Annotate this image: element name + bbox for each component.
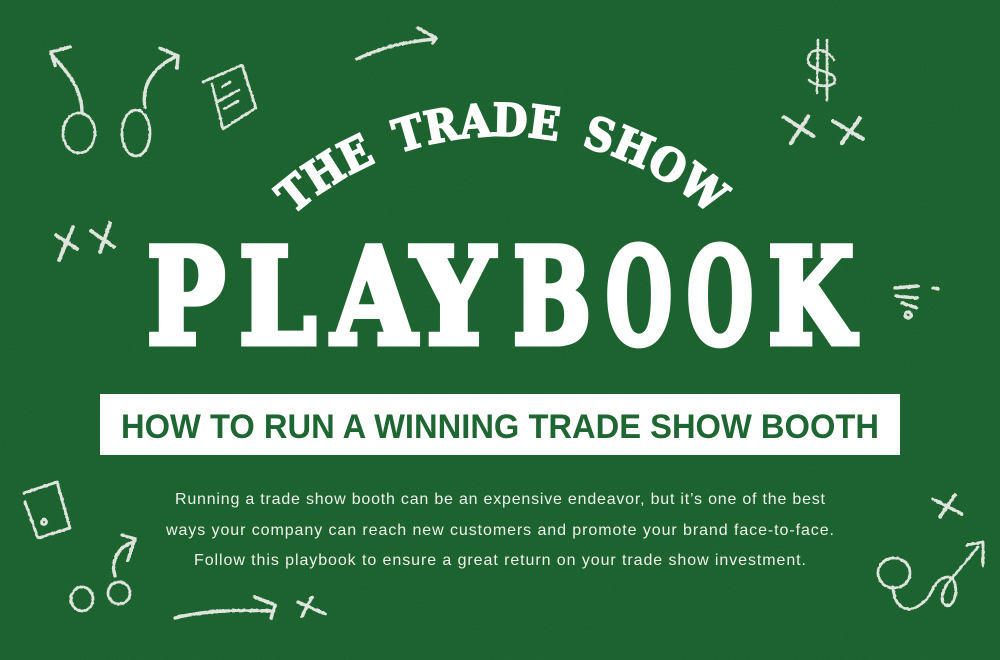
icon: document	[203, 65, 256, 129]
subtitle banner	[100, 394, 900, 455]
title: Playbook: L	[239, 220, 316, 375]
icon: wifi signal	[895, 286, 938, 318]
icon: X marks left	[56, 223, 114, 260]
title: Playbook: K	[768, 220, 857, 375]
arrow: bottom left	[175, 597, 275, 618]
title: Playbook: Y	[410, 220, 496, 375]
intro paragraph: ways your company can reach new customers and promote your brand face-to-face.	[165, 522, 834, 539]
icon: tablet	[24, 482, 70, 538]
intro paragraph: Running a trade show booth can be an expensive endeavor, but it’s one of the best	[175, 491, 826, 508]
icon: dollar sign	[808, 40, 835, 100]
intro paragraph	[165, 491, 834, 569]
title: Playbook: O	[606, 220, 672, 375]
icon: X mark bottom	[298, 597, 325, 616]
icon: play, circle with looping arrow	[878, 542, 983, 609]
icon: play, circle with arrow up right	[122, 48, 178, 156]
title: The Trade Show arc: THE TRADE SHOW	[271, 102, 733, 212]
title: Playbook: A	[330, 220, 417, 375]
title: Playbook: O	[687, 220, 753, 375]
subtitle banner: HOW TO RUN A WINNING TRADE SHOW BOOTH	[121, 408, 879, 446]
icon: play, two circles with arrow	[71, 535, 135, 611]
title: Playbook: B	[513, 220, 591, 375]
icon: play, circle with arrow up left	[51, 47, 95, 153]
arrow: top centre	[357, 28, 436, 59]
intro paragraph: Follow this playbook to ensure a great return on your trade show investment.	[194, 552, 806, 569]
title: Playbook: P	[147, 220, 225, 375]
icon: X mark bottom right	[933, 495, 962, 517]
icon: X marks top right	[784, 117, 863, 143]
